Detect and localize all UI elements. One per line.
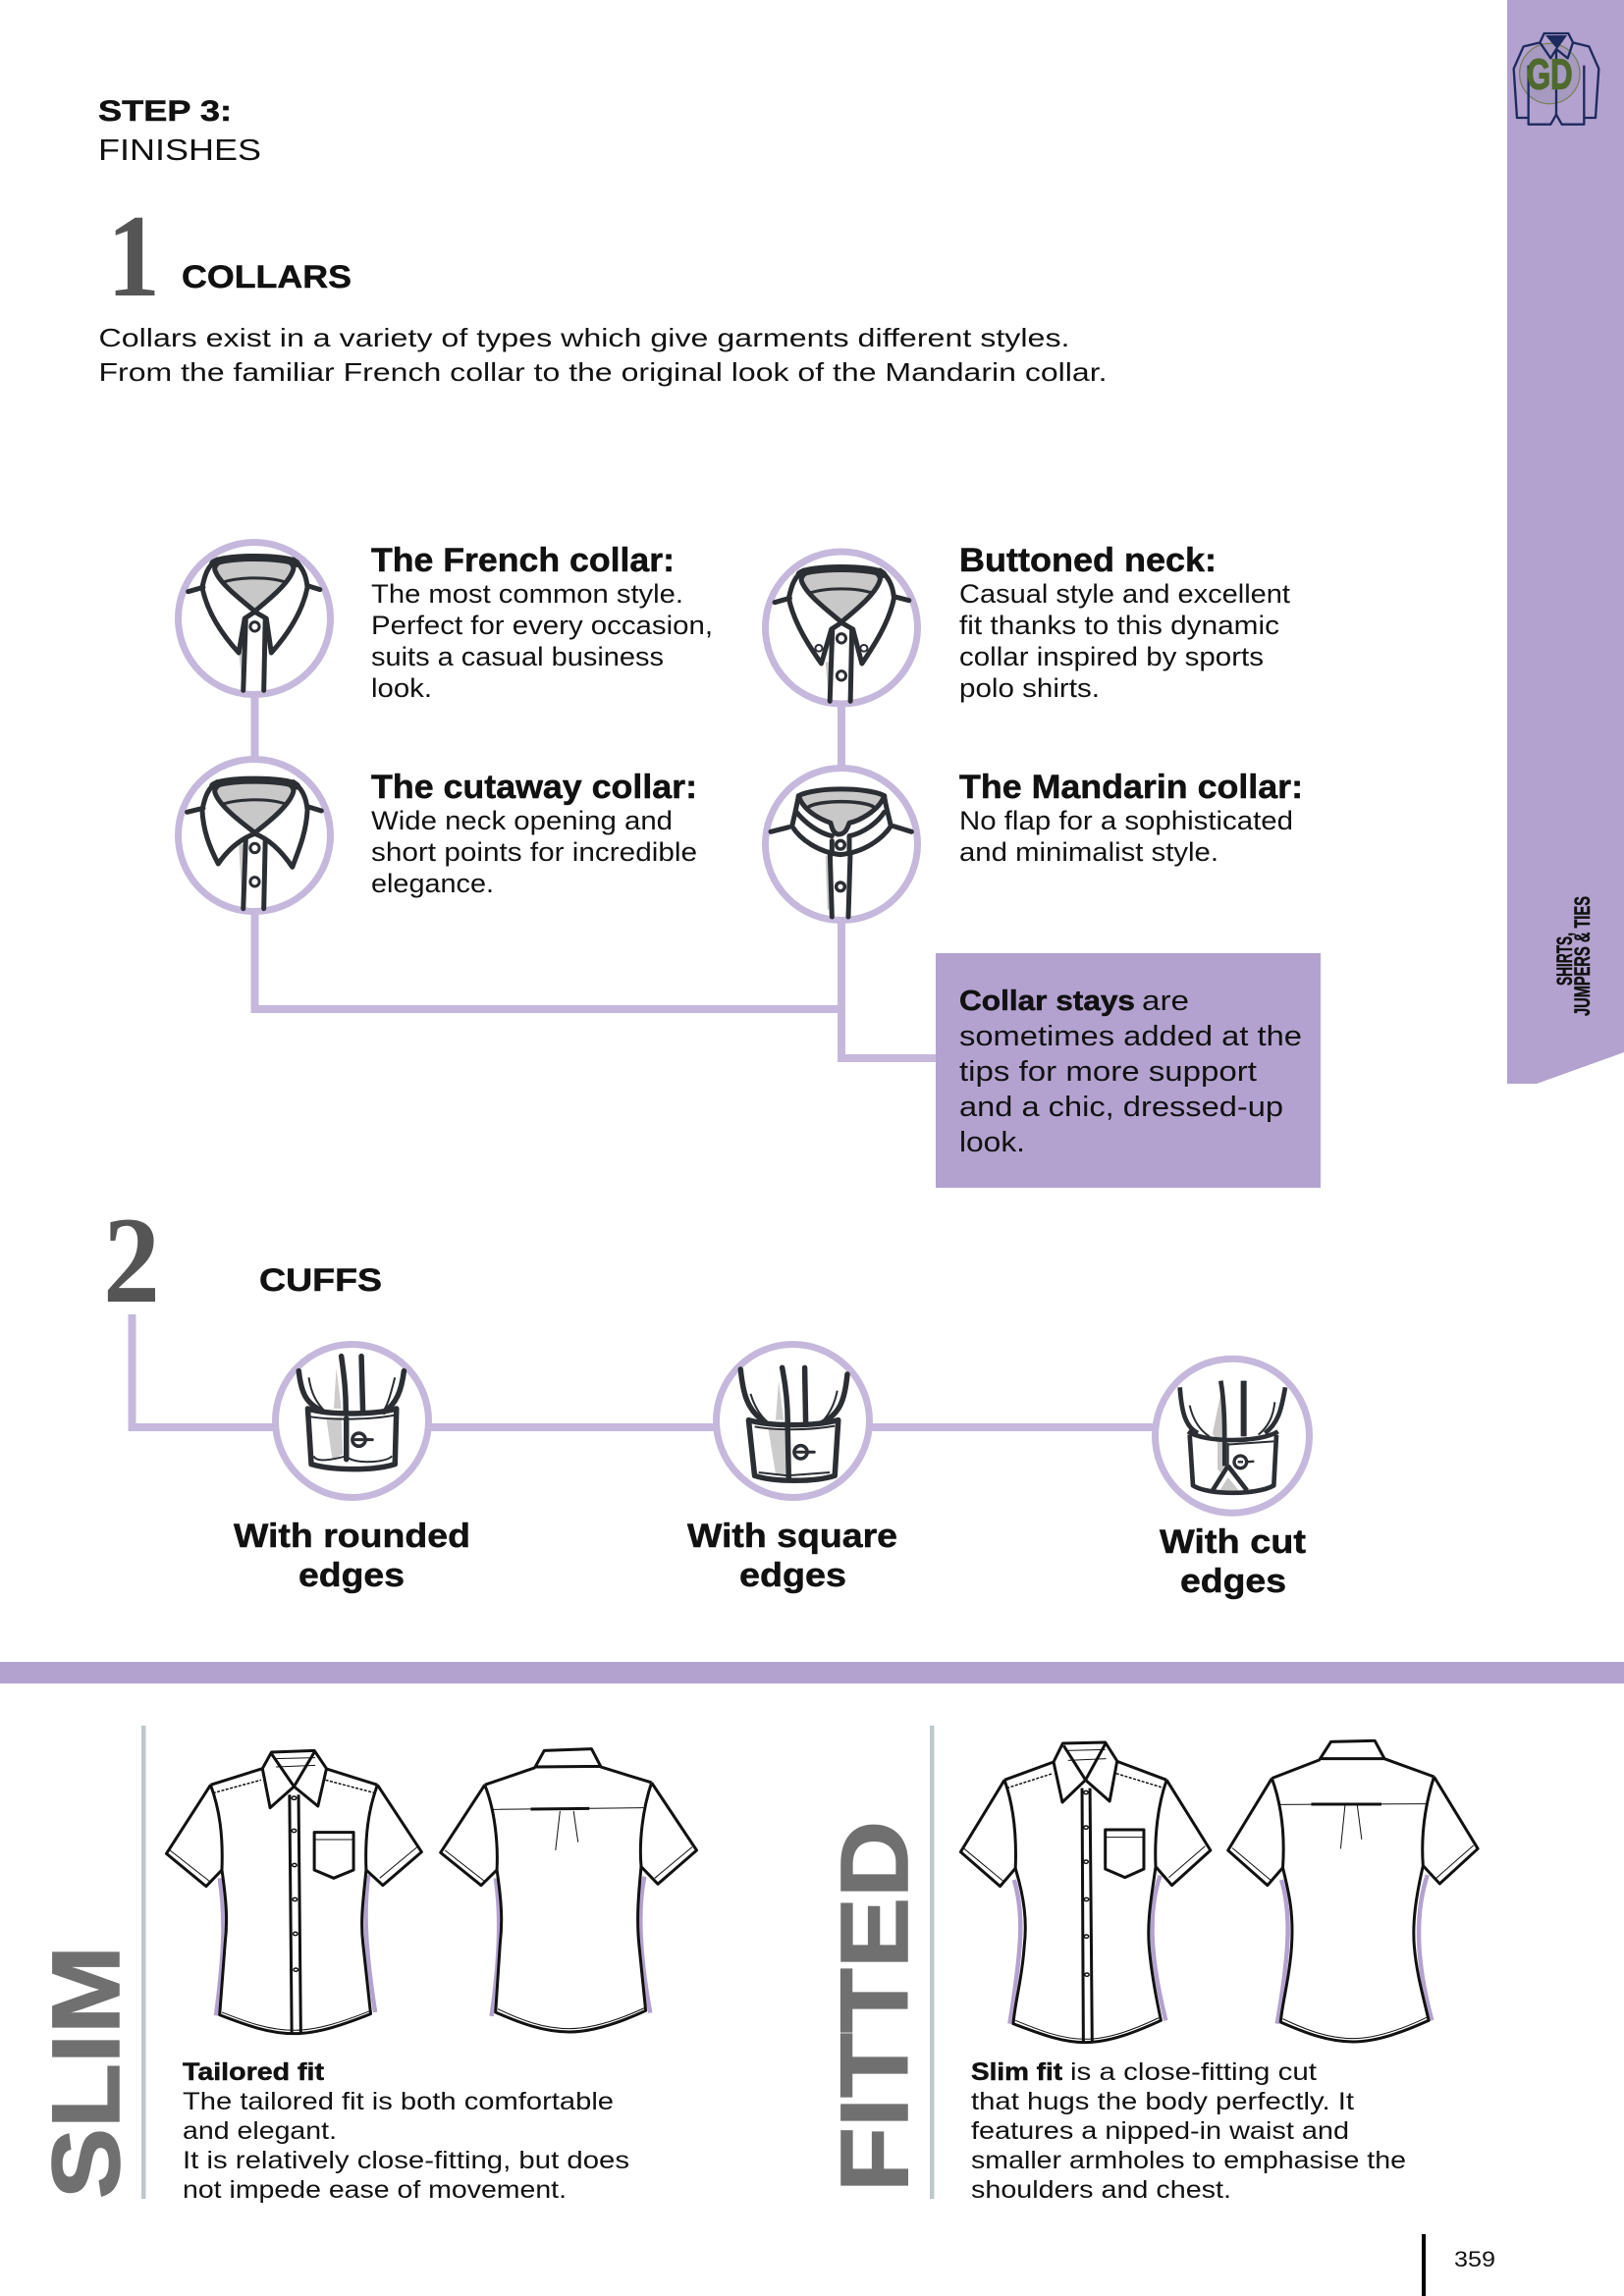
text: slim fit: that hugs the body perfectly. It [971, 2088, 1354, 2115]
label: square edges [687, 1518, 897, 1594]
icon: cuff with square edges [717, 1345, 870, 1498]
label: square edges: With square [687, 1518, 897, 1555]
callout: collar stays: Collar stays [959, 986, 1135, 1017]
icon: shirt logo: GD [1527, 52, 1573, 99]
panel: slim fit [32, 1726, 697, 2204]
text: French collar: The French collar: [371, 542, 675, 579]
text: buttoned neck: Casual style and excellent [959, 579, 1291, 609]
callout: collar stays [936, 953, 1321, 1188]
icon: buttoned neck [766, 552, 917, 704]
text: cutaway collar: The cutaway collar: [371, 769, 697, 806]
text: French collar: look. [371, 673, 432, 703]
heading: collars: COLLARS [182, 259, 352, 294]
text: slim fit: Slim fit [971, 2058, 1063, 2086]
callout: collar stays: tips for more support [959, 1056, 1257, 1088]
text: tailored fit: not impede ease of movement. [183, 2176, 567, 2204]
numeral 2: 2 [103, 1193, 160, 1329]
icon: shirt logo [1514, 33, 1598, 125]
text: cutaway collar: Wide neck opening and [371, 806, 673, 835]
title: STEP 3: [98, 95, 232, 128]
text: tailored fit: It is relatively close-fitting, but does [183, 2147, 629, 2174]
connector lines: cuffs [132, 1314, 1159, 1427]
section label [1552, 896, 1595, 1016]
callout: collar stays: look. [959, 1127, 1025, 1158]
callout: collar stays: sometimes added at the [959, 1021, 1302, 1052]
icon: cuff with cut edges [1155, 1359, 1310, 1513]
shirt: slim back [441, 1749, 697, 2032]
text: buttoned neck: collar inspired by sports [959, 642, 1264, 671]
text: buttoned neck: fit thanks to this dynamic [959, 611, 1279, 640]
icon: Mandarin collar [766, 768, 917, 921]
intro text: Collars exist in a variety of types which give garments different styles. [98, 323, 1070, 352]
heading: FITTED: FITTED [821, 1821, 928, 2192]
icon: French collar [179, 542, 330, 695]
section label: JUMPERS & TIES [1570, 896, 1595, 1016]
text: cutaway collar: elegance. [371, 869, 494, 898]
callout: collar stays: are [1142, 986, 1189, 1017]
connector lines: collars [255, 628, 943, 1058]
label: square edges: edges [739, 1557, 846, 1594]
text: French collar [371, 542, 713, 703]
icon: cutaway collar [179, 760, 330, 911]
label: rounded edges: edges [298, 1557, 405, 1594]
callout: collar stays: and a chic, dressed-up [959, 1092, 1283, 1123]
text: Mandarin collar [959, 769, 1303, 867]
page number: 359 [1454, 2247, 1495, 2271]
text: buttoned neck: Buttoned neck: [959, 542, 1217, 579]
page number [1422, 2234, 1495, 2296]
text: slim fit: is a close-fitting cut [1070, 2058, 1317, 2086]
icon: cuff with rounded edges [275, 1345, 428, 1498]
label: rounded edges: With rounded [234, 1518, 470, 1555]
text: cutaway collar [371, 769, 697, 898]
text: tailored fit: The tailored fit is both comfortable [183, 2088, 614, 2115]
section label: SHIRTS, [1552, 933, 1577, 986]
label: cut edges: With cut [1160, 1523, 1306, 1561]
text: tailored fit: and elegant. [183, 2117, 337, 2145]
numeral 1: 1 [107, 190, 160, 321]
heading: cuffs: CUFFS [259, 1262, 382, 1298]
shirt: fitted back [1228, 1740, 1478, 2042]
text: French collar: The most common style. [371, 579, 683, 609]
label: rounded edges [234, 1518, 470, 1594]
intro text [98, 323, 1108, 387]
text: Mandarin collar: and minimalist style. [959, 837, 1218, 867]
text: slim fit [971, 2058, 1406, 2204]
text: slim fit: shoulders and chest. [971, 2176, 1231, 2204]
text: tailored fit [183, 2058, 629, 2204]
text: French collar: Perfect for every occasion, [371, 611, 713, 640]
text: tailored fit: Tailored fit [183, 2058, 325, 2086]
panel: side tab [1507, 0, 1624, 1084]
text: buttoned neck: polo shirts. [959, 673, 1100, 703]
text: cutaway collar: short points for incredible [371, 837, 697, 867]
text: French collar: suits a casual business [371, 642, 664, 671]
text: slim fit: features a nipped-in waist and [971, 2117, 1349, 2145]
heading: SLIM: SLIM [32, 1946, 139, 2199]
label: cut edges [1160, 1523, 1306, 1600]
intro text: From the familiar French collar to the original look of the Mandarin collar. [98, 357, 1108, 387]
panel: fitted [821, 1726, 1478, 2204]
text: buttoned neck [959, 542, 1291, 703]
text: Mandarin collar: The Mandarin collar: [959, 769, 1303, 806]
text: slim fit: smaller armholes to emphasise the [971, 2147, 1406, 2174]
text: Mandarin collar: No flap for a sophisticated [959, 806, 1293, 835]
divider band [0, 1662, 1624, 1683]
shirt: fitted front [960, 1742, 1211, 2043]
label: cut edges: edges [1180, 1563, 1286, 1600]
shirt: slim front [166, 1750, 421, 2034]
title [98, 95, 261, 167]
title: FINISHES [98, 133, 261, 167]
